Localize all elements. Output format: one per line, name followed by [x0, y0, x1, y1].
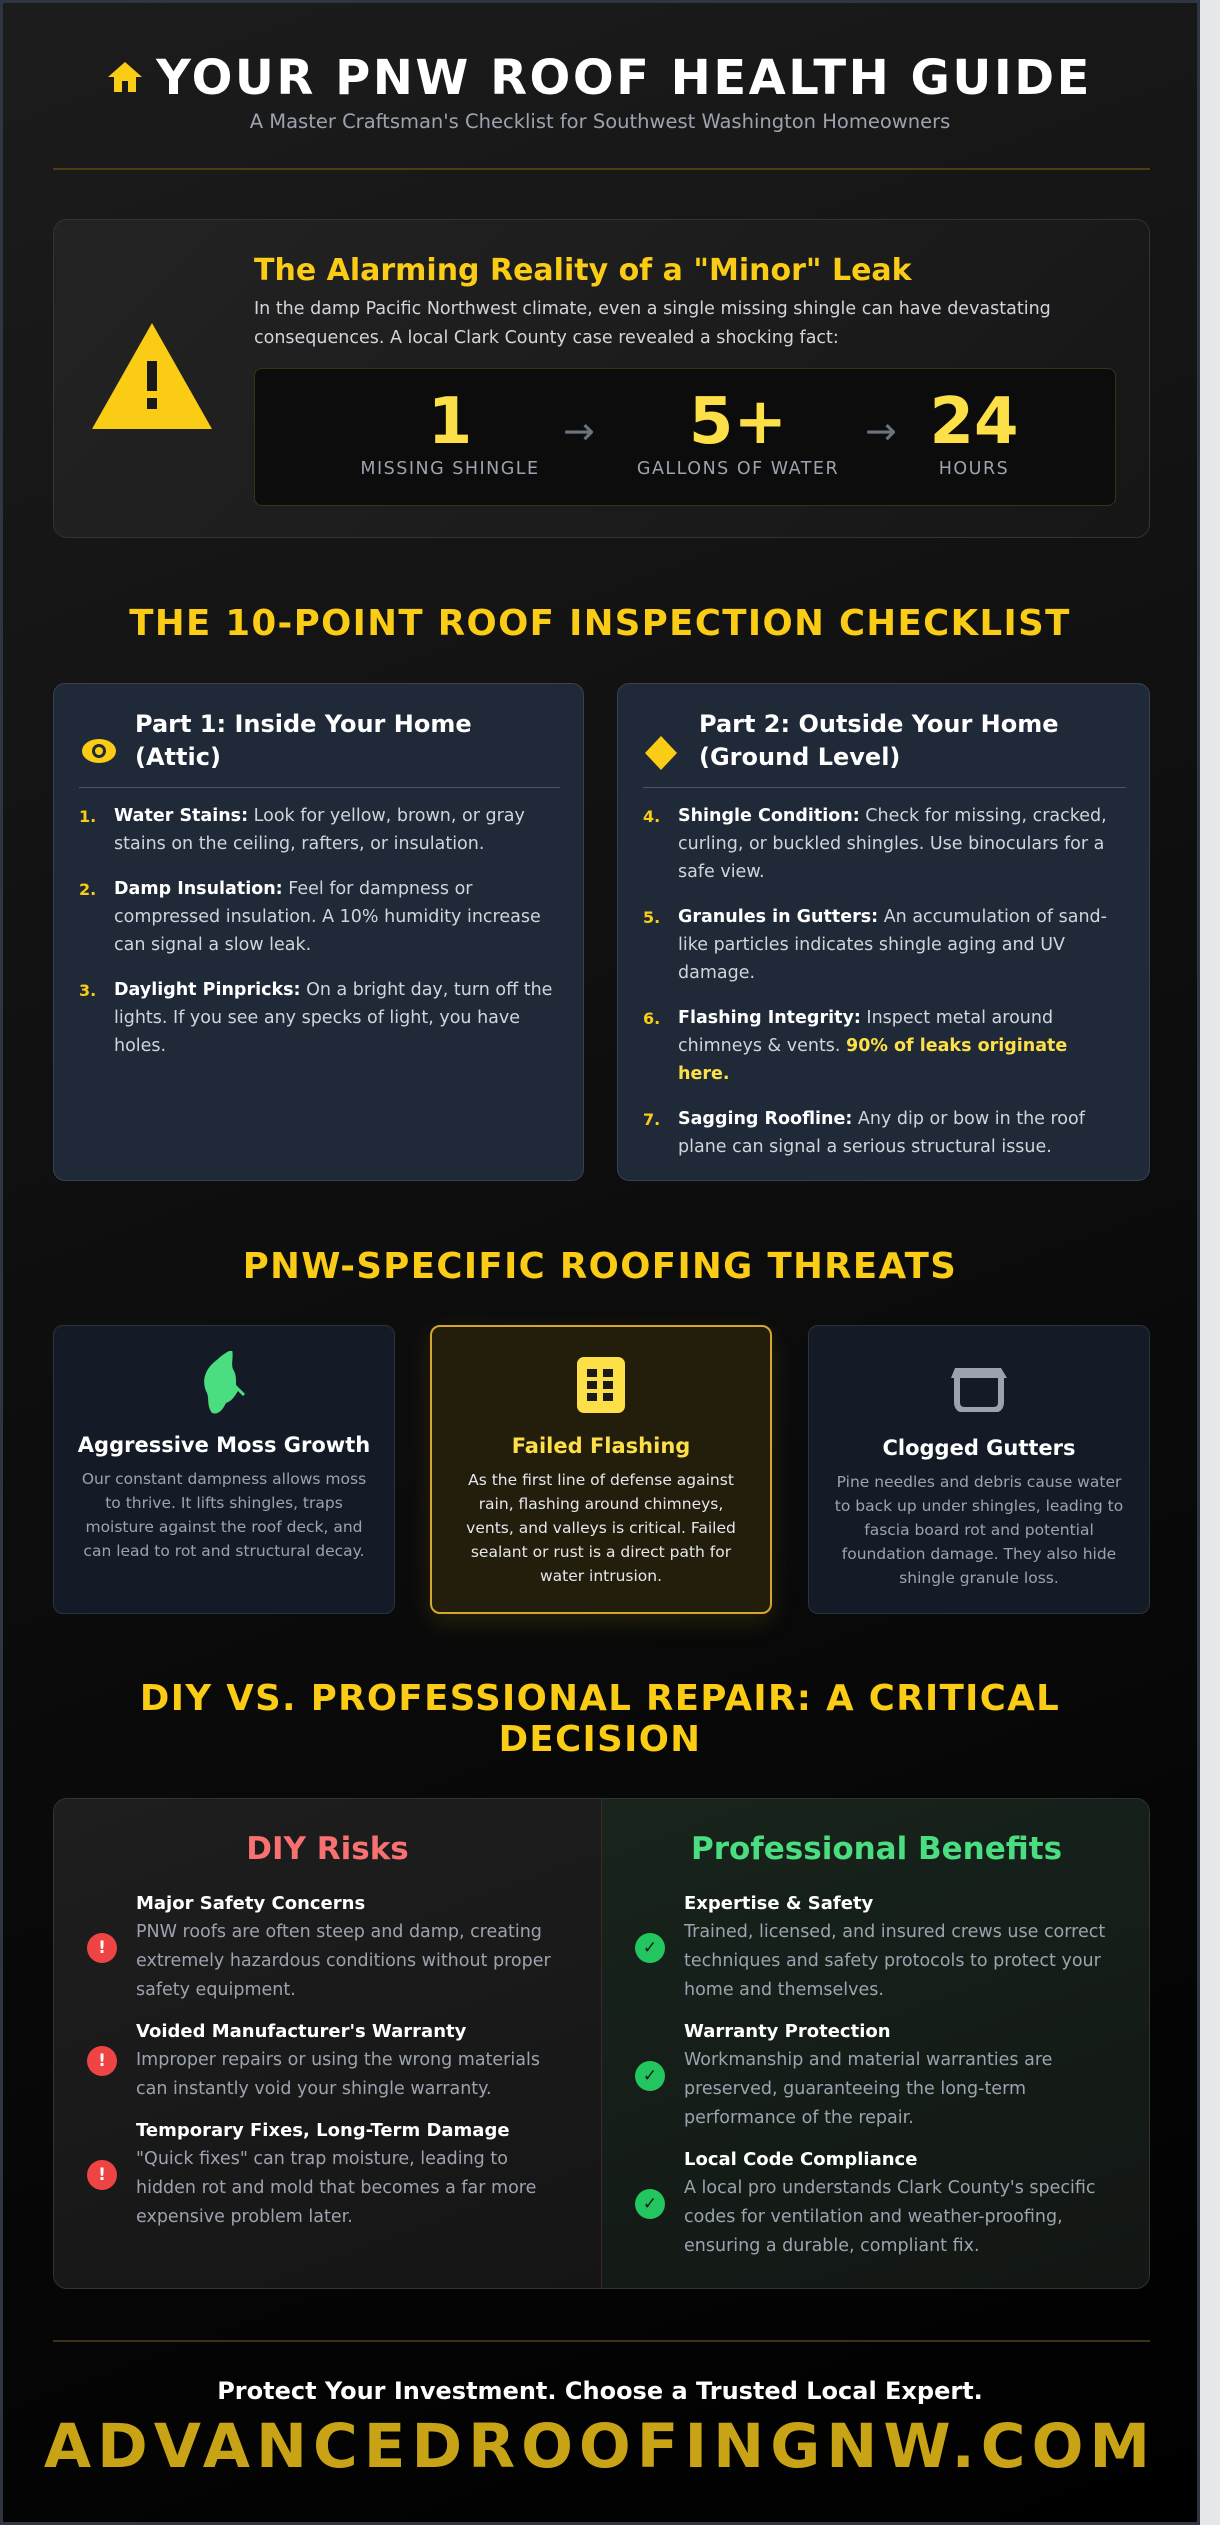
list: 4. [643, 807, 660, 826]
heading: The Alarming Reality of a "Minor" Leak [254, 253, 912, 288]
heading: diy vs pro [140, 1678, 1060, 1760]
panel: gutters: Clogged Gutters [882, 1436, 1076, 1460]
stat 2: GALLONS OF WATER [637, 459, 839, 479]
heading [699, 710, 1059, 771]
list: Granules in Gutters: An accumulation of sand-​like particles indicates shingle aging and UV damage. [678, 907, 1107, 983]
panel: part 1 [53, 683, 584, 1181]
list: 1. [79, 807, 96, 826]
heading: (Attic) [135, 743, 221, 771]
footer tagline: Protect Your Investment. Choose a Trusted Local Expert. [217, 2377, 983, 2405]
panel: comparison [53, 1798, 1150, 2289]
stat 1: MISSING SHINGLE [360, 459, 540, 479]
icon: warning triangle [92, 323, 212, 429]
column: professional benefits: Trained, licensed, and insured crews use correct techniques and safety protocols to protect your home and themselves. [684, 1922, 1105, 2000]
heading: (Ground Level) [699, 743, 900, 771]
column: DIY risks [54, 1799, 602, 2290]
list [643, 806, 1107, 1157]
list [79, 806, 552, 1056]
stat 2 [637, 385, 839, 479]
list: Flashing Integrity: Inspect metal around chimneys & vents. 90% of leaks originate [678, 1008, 1067, 1056]
header [108, 50, 1092, 133]
heading: Part 2: Outside Your Home [699, 710, 1059, 738]
arrow: → [865, 409, 897, 453]
panel: moss: Our constant dampness allows moss to thrive. It lifts shingles, traps moisture against the roof deck, and can lead to rot and structural decay. [82, 1470, 366, 1560]
heading: diy vs pro: DECISION [499, 1719, 701, 1760]
column: DIY risks: ! [98, 1938, 106, 1958]
column: DIY risks: Major Safety Concerns [136, 1893, 365, 1914]
stat 3: HOURS [939, 459, 1009, 479]
stat 3: 24 [929, 385, 1019, 459]
column: professional benefits: Warranty Protection [684, 2021, 891, 2042]
column: DIY risks: ! [98, 2051, 106, 2071]
column: professional benefits: Local Code Compliance [684, 2149, 917, 2170]
column: DIY risks: Temporary Fixes, Long-Term Damage [136, 2120, 510, 2141]
panel: flashing [430, 1325, 772, 1614]
icon: flashing [577, 1357, 625, 1413]
column: DIY risks: Voided Manufacturer's Warranty [136, 2021, 466, 2042]
heading: threats: PNW-SPECIFIC ROOFING THREATS [243, 1246, 957, 1287]
panel: gutters: Pine needles and debris cause water to back up under shingles, leading to fascia board rot and potential foundation damage. They also hide shingle granule loss. [835, 1473, 1123, 1587]
panel: gutters [808, 1325, 1150, 1614]
list: 3. [79, 981, 96, 1000]
list: Sagging Roofline: Any dip or bow in the roof plane can signal a serious structural issue. [678, 1109, 1085, 1157]
footer url: ADVANCEDROOFINGNW.COM [44, 2411, 1156, 2482]
panel: flashing: Failed Flashing [512, 1434, 690, 1458]
heading [135, 710, 472, 771]
column: professional benefits: ✓ [643, 2066, 657, 2086]
list: here. [678, 1064, 729, 1084]
subtitle: A Master Craftsman's Checklist for Southwest Washington Homeowners [250, 110, 950, 133]
list: 2. [79, 880, 96, 899]
arrow: → [563, 409, 595, 453]
list: 7. [643, 1110, 660, 1129]
column: DIY risks: DIY Risks [246, 1831, 409, 1867]
icon: diamond [645, 736, 677, 770]
column: professional benefits: Professional Benefits [691, 1831, 1062, 1867]
title: YOUR PNW ROOF HEALTH GUIDE [156, 50, 1092, 106]
panel: part 2 [617, 683, 1150, 1181]
icon: moss [204, 1351, 245, 1414]
panel: flashing: As the first line of defense against rain, flashing around chimneys, vents, and valleys is critical. Failed sealant or rust is a direct path for water intrusion. [466, 1471, 736, 1585]
text: In the damp Pacific Northwest climate, even a single missing shingle can have devastating consequences. A local Clark County case revealed a shocking fact: [254, 299, 1051, 348]
stat 2: 5+ [689, 385, 787, 459]
list: 6. [643, 1009, 660, 1028]
list: Shingle Condition: Check for missing, cracked, curling, or buckled shingles. Use binoculars for a safe view. [678, 806, 1107, 882]
list: 5. [643, 908, 660, 927]
panel: alarming reality [53, 219, 1150, 538]
column: professional benefits: A local pro understands Clark County's specific codes for ventilation and weather-proofing, ensuring a durable, compliant fix. [684, 2178, 1096, 2256]
icon: eye [82, 739, 116, 763]
column: professional benefits: ✓ [643, 2194, 657, 2214]
column: professional benefits [602, 1799, 1151, 2290]
list: Water Stains: Look for yellow, brown, or gray stains on the ceiling, rafters, or insulation. [114, 806, 525, 854]
column: professional benefits: ✓ [643, 1938, 657, 1958]
column: DIY risks: ! [98, 2164, 106, 2184]
column: professional benefits: Workmanship and material warranties are preserved, guaranteeing the long-term performance of the repair. [684, 2050, 1052, 2128]
stats box [254, 368, 1116, 506]
column: DIY risks: Improper repairs or using the wrong materials can instantly void your shingle warranty. [136, 2050, 540, 2099]
heading: Part 1: Inside Your Home [135, 710, 472, 738]
column: professional benefits: Expertise & Safety [684, 1893, 873, 1914]
heading: checklist: THE 10-POINT ROOF INSPECTION CHECKLIST [129, 603, 1071, 644]
panel: moss [53, 1325, 395, 1614]
list: Daylight Pinpricks: On a bright day, turn off the lights. If you see any specks of light, you have holes. [114, 980, 552, 1056]
column: DIY risks: "Quick fixes" can trap moisture, leading to hidden rot and mold that becomes a far more expensive problem later. [136, 2149, 536, 2227]
stat 1 [360, 385, 540, 479]
column: DIY risks: PNW roofs are often steep and damp, creating extremely hazardous conditions without proper safety equipment. [136, 1922, 551, 2000]
heading: diy vs pro: DIY VS. PROFESSIONAL REPAIR: A CRITICAL [140, 1678, 1060, 1719]
list: Damp Insulation: Feel for dampness or compressed insulation. A 10% humidity increase can signal a slow leak. [114, 879, 541, 955]
icon: gutter [951, 1368, 1007, 1412]
panel: moss: Aggressive Moss Growth [78, 1433, 370, 1457]
stat 1: 1 [428, 385, 472, 459]
